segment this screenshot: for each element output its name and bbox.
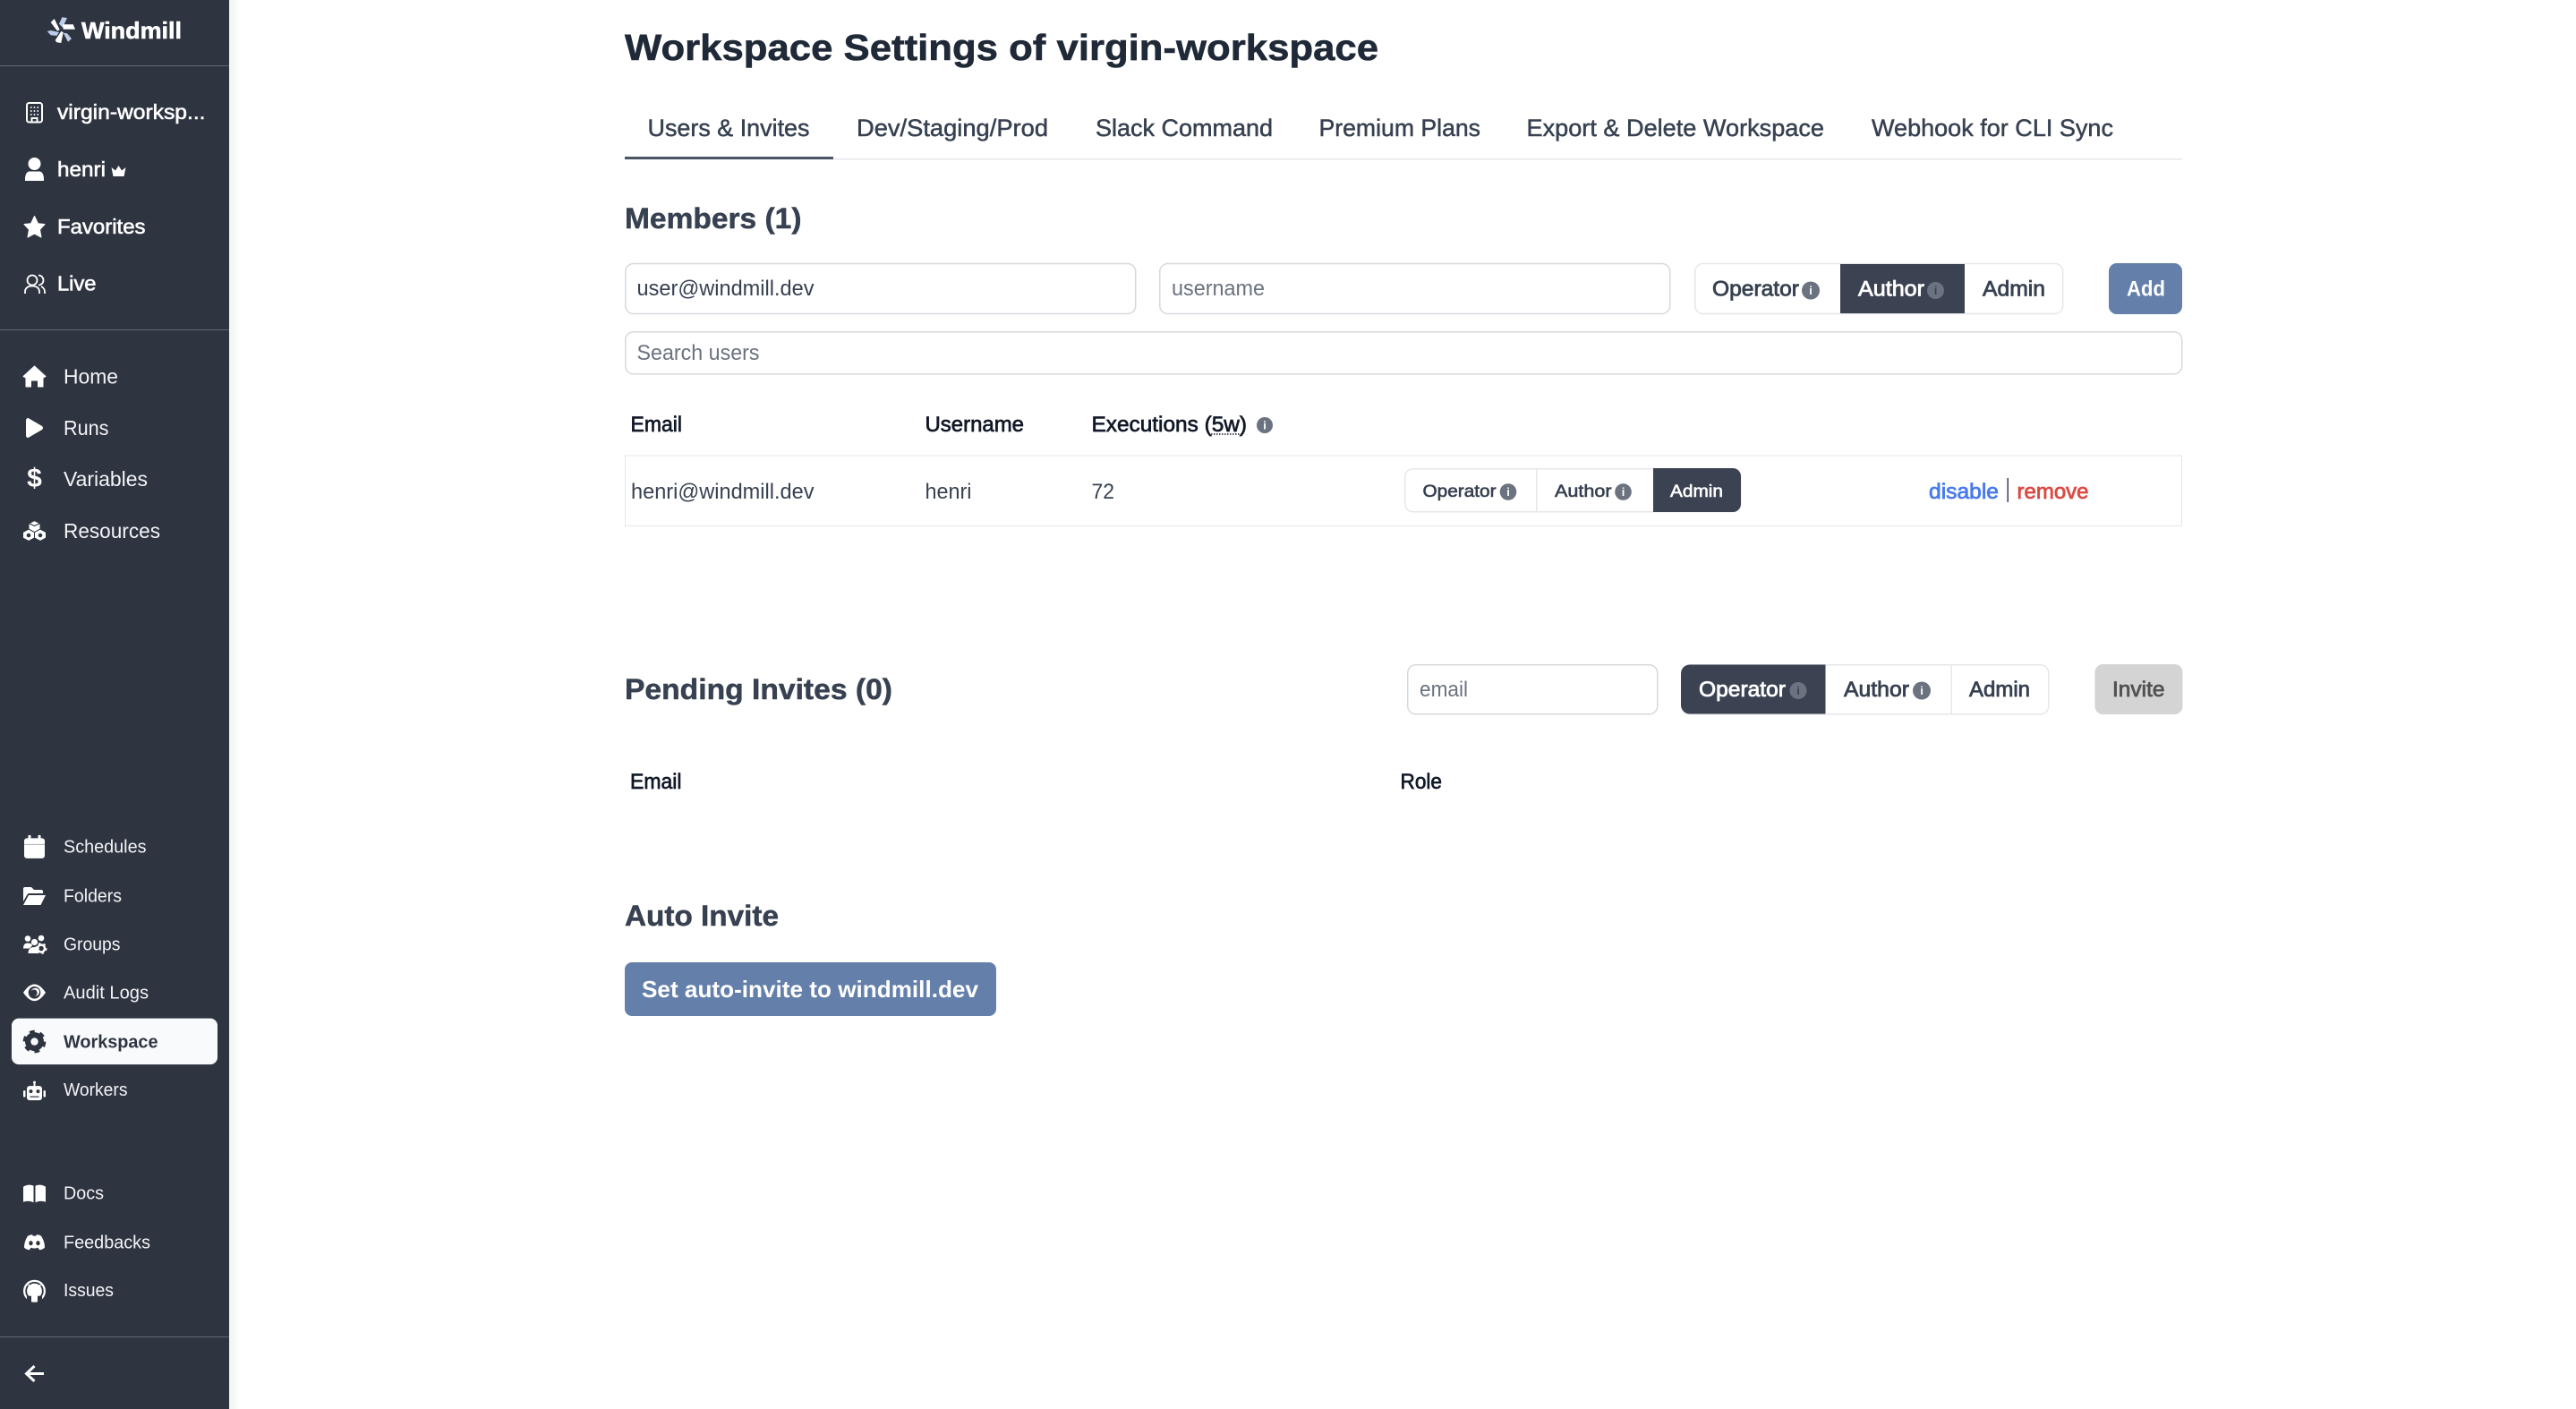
nav item: Home: Home <box>64 365 118 389</box>
nav item: Schedules <box>24 835 147 858</box>
tabs: Users & Invites <box>648 115 809 141</box>
icon: info <box>1790 682 1806 699</box>
members table <box>625 413 2182 526</box>
icon: info <box>1615 483 1632 500</box>
add member form <box>626 263 2182 314</box>
icon: info: i <box>1622 485 1625 499</box>
icon: building <box>27 103 42 122</box>
invite form <box>1408 664 2182 714</box>
tabs: Premium Plans <box>1319 115 1480 141</box>
icon: collapse arrow <box>27 1366 44 1381</box>
nav item: Docs <box>23 1183 104 1204</box>
icon: info: i <box>1809 284 1813 297</box>
nav item: Docs: Docs <box>64 1183 104 1204</box>
role toggle: Admin active: Admin <box>1670 482 1723 501</box>
table header: Username <box>925 413 1024 437</box>
panel: sidebar <box>0 0 229 1409</box>
icon: crown <box>111 166 125 176</box>
nav item: Home <box>23 365 118 389</box>
input: email: user@windmill.dev <box>637 277 815 301</box>
icon: home <box>23 366 46 387</box>
button: set auto-invite: Set auto-invite to windmill.dev <box>642 976 979 1003</box>
icon: group with gear <box>23 935 47 953</box>
tabs <box>625 115 2182 159</box>
nav item: Feedbacks: Feedbacks <box>64 1233 150 1253</box>
input: search users: Search users <box>637 341 759 365</box>
icon: info: i <box>1796 684 1800 697</box>
icon: play <box>26 418 43 438</box>
icon: github <box>23 1280 46 1302</box>
table header <box>630 413 1273 437</box>
input: username: username <box>1172 277 1265 301</box>
heading: Members: Members (1) <box>625 202 802 235</box>
button: set auto-invite <box>625 962 996 1016</box>
table header: Executions (5w) <box>1092 413 1247 437</box>
input: username <box>1160 263 1670 313</box>
table row: henri: henri <box>925 480 972 504</box>
nav item: Groups <box>23 935 120 954</box>
icon: windmill pinwheel <box>47 17 75 43</box>
icon: cubes <box>23 521 47 541</box>
icon: person <box>25 158 44 181</box>
role toggle: Author active: Operator <box>1712 278 1799 301</box>
nav item: Folders <box>23 886 122 906</box>
icon: star <box>24 217 45 237</box>
button: Add <box>2109 263 2182 314</box>
action: remove: remove <box>2017 480 2089 504</box>
role toggle: Author active: Admin <box>1983 278 2045 301</box>
icon: robot <box>23 1081 46 1100</box>
nav item: Audit Logs: Audit Logs <box>64 983 149 1003</box>
role toggle: Operator active: Operator <box>1699 678 1786 702</box>
nav item: Issues <box>23 1280 114 1302</box>
icon: info <box>1257 417 1273 433</box>
icon: book <box>23 1185 46 1202</box>
nav item: workspace selector: virgin-worksp... <box>57 100 206 124</box>
title: Workspace Settings of virgin-workspace <box>625 27 1378 68</box>
input: email <box>626 263 1136 313</box>
nav item: Variables: Variables <box>64 467 148 491</box>
heading: Pending Invites: Pending Invites (0) <box>625 673 892 705</box>
role toggle: Admin active: Operator <box>1423 482 1497 501</box>
icon: folder open <box>23 887 46 905</box>
logo: Windmill: Windmill <box>81 17 182 44</box>
icon: gear <box>25 1032 44 1051</box>
icon: discord <box>24 1234 45 1250</box>
role toggle: Author active <box>1695 263 2063 313</box>
table row: henri: henri@windmill.dev <box>631 480 815 504</box>
role toggle: Admin active: Author <box>1555 482 1612 501</box>
tabs: Export & Delete Workspace <box>1527 115 1824 141</box>
heading: Auto Invite: Auto Invite <box>625 900 779 932</box>
nav item: Live: Live <box>57 272 97 295</box>
nav item: Schedules: Schedules <box>64 836 147 857</box>
tabs: Dev/Staging/Prod <box>857 115 1048 141</box>
invites table header: Role <box>1400 770 1442 794</box>
nav item: Audit Logs <box>23 983 149 1003</box>
tabs: Webhook for CLI Sync <box>1872 115 2113 141</box>
icon: info: i <box>1920 684 1923 697</box>
role toggle: Author active: Author <box>1858 278 1924 301</box>
button: Invite (disabled): Invite <box>2112 678 2164 702</box>
nav item: user henri: henri <box>57 158 106 181</box>
role toggle: Operator active: Author <box>1844 678 1909 702</box>
role toggle: Operator active <box>1681 664 2049 714</box>
icon: dollar: $ <box>27 464 42 493</box>
nav item: Workers: Workers <box>64 1080 127 1100</box>
icon: info <box>1927 282 1944 299</box>
icon: info: i <box>1263 419 1267 431</box>
nav item: Runs <box>26 416 109 440</box>
input: search users <box>626 332 2182 374</box>
input: invite email: email <box>1420 678 1468 702</box>
nav item: Feedbacks <box>24 1233 150 1253</box>
table header: Email <box>630 413 682 437</box>
role toggle: Admin active <box>1405 468 1741 512</box>
nav item: Issues: Issues <box>64 1280 114 1301</box>
table row: henri: 72 <box>1092 480 1114 504</box>
icon: info: i <box>1934 284 1937 297</box>
invites table header <box>630 770 1442 794</box>
icon: eye <box>23 984 46 1001</box>
nav item: Workers <box>23 1080 127 1100</box>
nav item: Runs: Runs <box>64 416 109 440</box>
nav item: Resources <box>23 519 160 542</box>
nav item: Groups: Groups <box>64 935 120 954</box>
icon: info <box>1500 483 1516 500</box>
nav item: Workspace (active) <box>12 1019 218 1064</box>
nav item: Favorites: Favorites <box>57 215 145 238</box>
action: disable: disable <box>1929 480 1999 504</box>
icon: info <box>1913 682 1931 700</box>
nav item: user henri <box>25 158 125 181</box>
button: Add: Add <box>2127 278 2165 301</box>
invites table header: Email <box>630 770 682 794</box>
icon: calendar <box>24 835 45 858</box>
icon: users outline <box>25 276 45 294</box>
nav item: Live <box>25 272 97 295</box>
nav item: Workspace (active): Workspace <box>64 1032 158 1053</box>
nav item: Folders: Folders <box>64 886 122 906</box>
nav item: Variables <box>27 464 148 493</box>
icon: info <box>1802 281 1820 299</box>
table row: henri <box>625 456 2182 526</box>
nav item: Resources: Resources <box>64 519 160 542</box>
input: invite email <box>1408 665 1658 714</box>
tabs: Slack Command <box>1096 115 1273 141</box>
button: Invite (disabled) <box>2094 664 2182 714</box>
role toggle: Operator active: Admin <box>1969 678 2030 702</box>
icon: info: i <box>1506 485 1510 499</box>
